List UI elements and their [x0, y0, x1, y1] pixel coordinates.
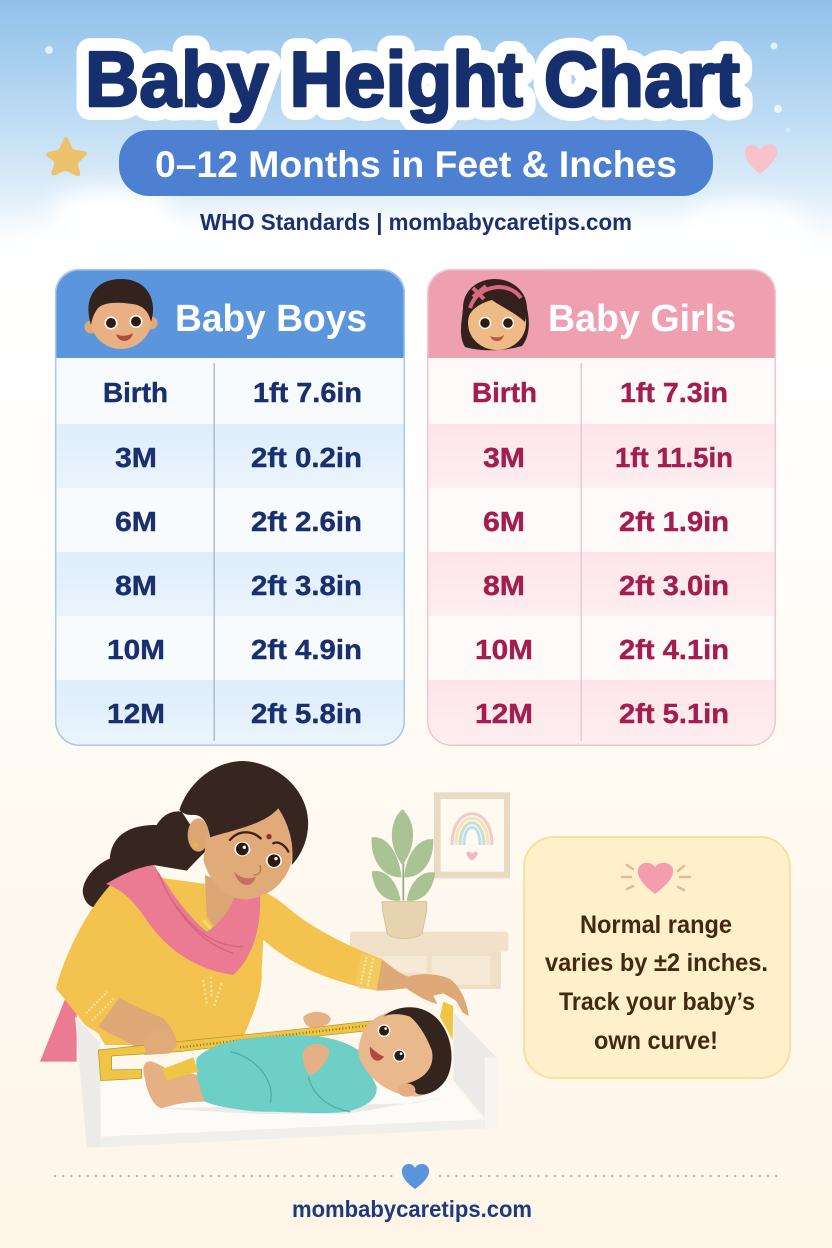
rows: boys: Birth	[103, 377, 168, 408]
rows: boys: 1ft 7.6in	[253, 377, 362, 408]
rows: boys: 2ft 0.2in	[251, 442, 362, 473]
rows: girls: Birth	[472, 377, 537, 408]
illustration: mother measuring baby	[40, 761, 510, 1147]
panel: baby girls	[427, 269, 776, 746]
potted plant	[372, 809, 435, 938]
callout text: Normal range	[580, 911, 732, 939]
rows: boys: 2ft 4.9in	[251, 634, 362, 665]
side table	[350, 932, 508, 989]
rows: boys	[103, 377, 362, 729]
neckline embroidery	[203, 918, 227, 933]
callout text: Track your baby’s	[559, 988, 755, 1016]
rows: girls: 2ft 3.0in	[619, 570, 729, 601]
rows: girls: 6M	[483, 506, 525, 537]
dupatta back drape	[40, 997, 77, 1062]
picture frame	[434, 792, 510, 878]
icon: footer heart	[402, 1164, 429, 1189]
rows: girls: 8M	[483, 570, 525, 601]
rows: boys: 2ft 2.6in	[251, 506, 362, 537]
baby hands	[303, 1012, 331, 1075]
rows: girls: 2ft 1.9in	[619, 506, 729, 537]
changing tray	[75, 1013, 497, 1147]
rows: girls: 10M	[475, 634, 533, 665]
measuring tape	[98, 1002, 453, 1081]
mother's left arm	[98, 997, 177, 1055]
panel: baby boys	[55, 269, 405, 746]
rows: girls: 1ft 11.5in	[615, 442, 733, 473]
rows: boys: 12M	[107, 698, 165, 729]
footer url: mombabycaretips.com	[292, 1196, 532, 1222]
rows: boys: 8M	[115, 570, 157, 601]
title: Baby Height Chart	[85, 35, 740, 123]
heading: baby boys: Baby Boys	[175, 298, 367, 340]
dupatta	[106, 865, 260, 975]
icon: boy face	[84, 279, 158, 349]
rows: girls: 12M	[475, 698, 533, 729]
callout: normal range	[524, 837, 790, 1078]
subtitle pill	[119, 130, 713, 196]
hair back	[83, 811, 207, 907]
neck	[205, 875, 243, 933]
callout text: varies by ±2 inches.	[545, 949, 768, 977]
rows: girls: 2ft 5.1in	[619, 698, 729, 729]
callout text	[545, 911, 768, 1055]
rows: girls: 2ft 4.1in	[619, 634, 729, 665]
rows: boys: 2ft 3.8in	[251, 570, 362, 601]
rows: boys: 10M	[107, 634, 165, 665]
rows: girls	[472, 377, 733, 729]
mother's right arm and hand	[377, 959, 469, 1016]
heading: baby girls: Baby Girls	[548, 298, 736, 340]
rows: boys: 2ft 5.8in	[251, 698, 362, 729]
callout text: own curve!	[594, 1027, 718, 1055]
mother's left sleeve cuff	[86, 992, 115, 1021]
clouds	[15, 188, 815, 258]
icon: star	[46, 137, 87, 176]
rows: girls: 1ft 7.3in	[620, 377, 728, 408]
source line: WHO Standards | mombabycaretips.com	[200, 209, 632, 235]
title: Baby Height Chart	[85, 35, 740, 123]
subtitle pill: 0–12 Months in Feet & Inches	[155, 144, 677, 185]
icon: girl face	[461, 279, 529, 350]
icon: heart	[745, 144, 777, 174]
baby onesie	[196, 1035, 377, 1113]
icon: heart with rays	[622, 863, 690, 894]
baby head	[358, 1007, 452, 1097]
sparkles	[45, 42, 790, 132]
kurta embroidery	[203, 977, 222, 1007]
baby arm folds	[230, 1052, 350, 1112]
face	[179, 761, 308, 899]
kurta	[56, 875, 383, 1045]
rows: boys: 6M	[115, 506, 157, 537]
lower tape over leg	[162, 1057, 198, 1080]
mother's fingers on tape	[143, 1030, 177, 1055]
mother's right sleeve cuff	[355, 953, 383, 991]
baby legs and foot	[143, 1061, 205, 1108]
rows: boys: 3M	[115, 442, 157, 473]
footer divider	[55, 1175, 778, 1177]
dupatta folds	[158, 873, 243, 953]
rows: girls: 3M	[483, 442, 525, 473]
